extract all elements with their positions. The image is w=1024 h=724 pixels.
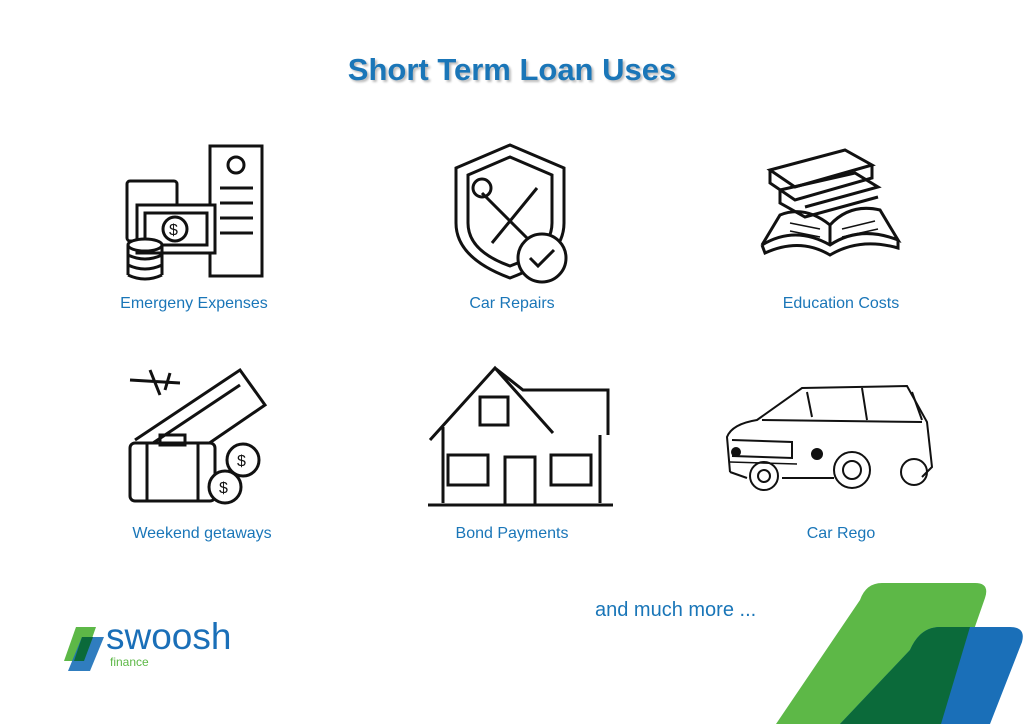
icon: weekend getaways [128,368,268,504]
icon: car repairs shield [454,143,568,284]
label: bond: Bond Payments [456,525,568,542]
label: weekend: Weekend getaways [132,525,272,542]
callout: and much more: and much more ... [595,599,756,621]
icon: weekend getaways: $ [219,480,228,497]
icon: weekend getaways: $ [237,453,246,470]
label: education: Education Costs [783,295,899,312]
label: car rego: Car Rego [807,525,875,542]
decorative swoosh shapes [776,583,1023,724]
label: car repairs: Car Repairs [469,295,555,312]
label: emergency: Emergeny Expenses [120,295,268,312]
logo: finance [110,655,149,669]
logo: swoosh [106,616,231,657]
icon: emergency expenses: $ [169,222,178,239]
logo [64,616,231,671]
title: Short Term Loan Uses [348,52,676,87]
icon: car [726,385,933,491]
icon: books [760,148,902,257]
icon: emergency expenses [126,144,264,280]
icon: house [428,366,613,506]
